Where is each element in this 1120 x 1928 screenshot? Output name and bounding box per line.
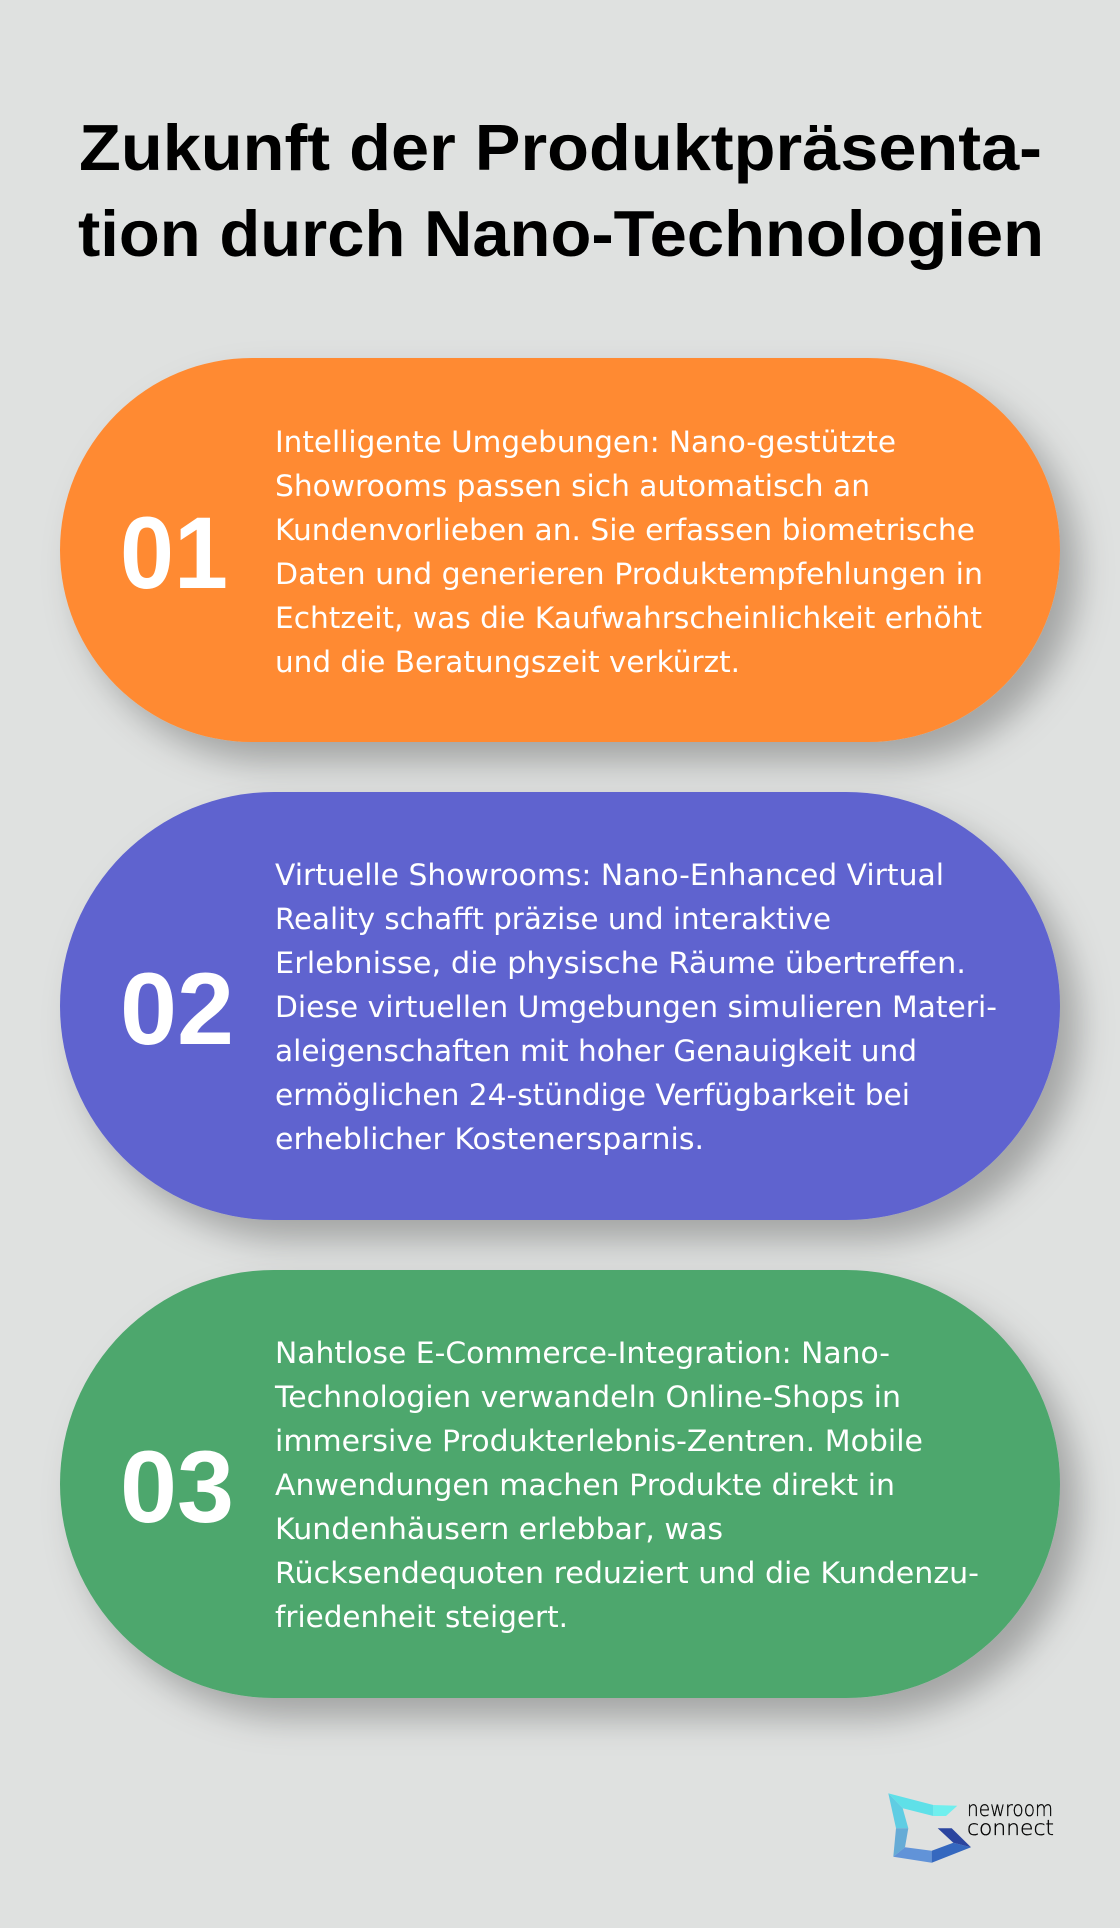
text block 01: Intelligente Umgebungen: Nano-gestützte — [275, 425, 896, 459]
text block 03: friedenheit steigert. — [275, 1600, 568, 1634]
number 03: 03 — [120, 1430, 234, 1544]
panel: 02 Virtuelle Showrooms — [60, 792, 1060, 1220]
logo wordmark — [967, 1797, 1054, 1840]
text block 03 — [274, 1336, 979, 1634]
text block 01: und die Beratungszeit verkürzt. — [275, 645, 740, 679]
title: tion durch Nano-Technologien — [78, 197, 1044, 270]
logo wordmark: connect — [967, 1816, 1054, 1840]
text block 01: Echtzeit, was die Kaufwahrscheinlichkeit erhöht — [275, 601, 982, 635]
text block 03: immersive Produkterlebnis-Zentren. Mobile — [275, 1424, 923, 1458]
text block 02: Erlebnisse, die physische Räume übertreffen. — [275, 946, 966, 980]
text block 02: ermöglichen 24-stündige Verfügbarkeit bei — [275, 1078, 910, 1112]
text block 03: Nahtlose E-Commerce-Integration: Nano- — [275, 1336, 890, 1370]
logo: newroom connect — [888, 1793, 1054, 1863]
text block 01 — [275, 425, 983, 679]
text block 02: Diese virtuellen Umgebungen simulieren Materi- — [275, 990, 997, 1024]
logo icon — [888, 1793, 971, 1863]
title — [78, 111, 1044, 270]
text block 03: Technologien verwandeln Online-Shops in — [274, 1380, 901, 1414]
text block 01: Kundenvorlieben an. Sie erfassen biometrische — [275, 513, 975, 547]
text block 02: erheblicher Kostenersparnis. — [275, 1122, 704, 1156]
text block 01: Daten und generieren Produktempfehlungen in — [275, 557, 983, 591]
number 01: 01 — [120, 496, 228, 610]
panel: 01 Intelligente Umgebungen — [60, 358, 1060, 742]
text block 02: Reality schafft präzise und interaktive — [275, 902, 831, 936]
number 02: 02 — [120, 952, 234, 1066]
text block 01: Showrooms passen sich automatisch an — [275, 469, 870, 503]
text block 02 — [275, 858, 997, 1156]
text block 02: aleigenschaften mit hoher Genauigkeit und — [275, 1034, 917, 1068]
logo wordmark: newroom — [967, 1797, 1053, 1821]
panel: 03 Nahtlose E-Commerce-Integration — [60, 1270, 1060, 1698]
text block 03: Anwendungen machen Produkte direkt in — [275, 1468, 895, 1502]
text block 03: Rücksendequoten reduziert und die Kundenzu- — [275, 1556, 979, 1590]
title: Zukunft der Produktpräsenta- — [79, 111, 1042, 184]
text block 03: Kundenhäusern erlebbar, was — [275, 1512, 723, 1546]
text block 02: Virtuelle Showrooms: Nano-Enhanced Virtual — [275, 858, 944, 892]
